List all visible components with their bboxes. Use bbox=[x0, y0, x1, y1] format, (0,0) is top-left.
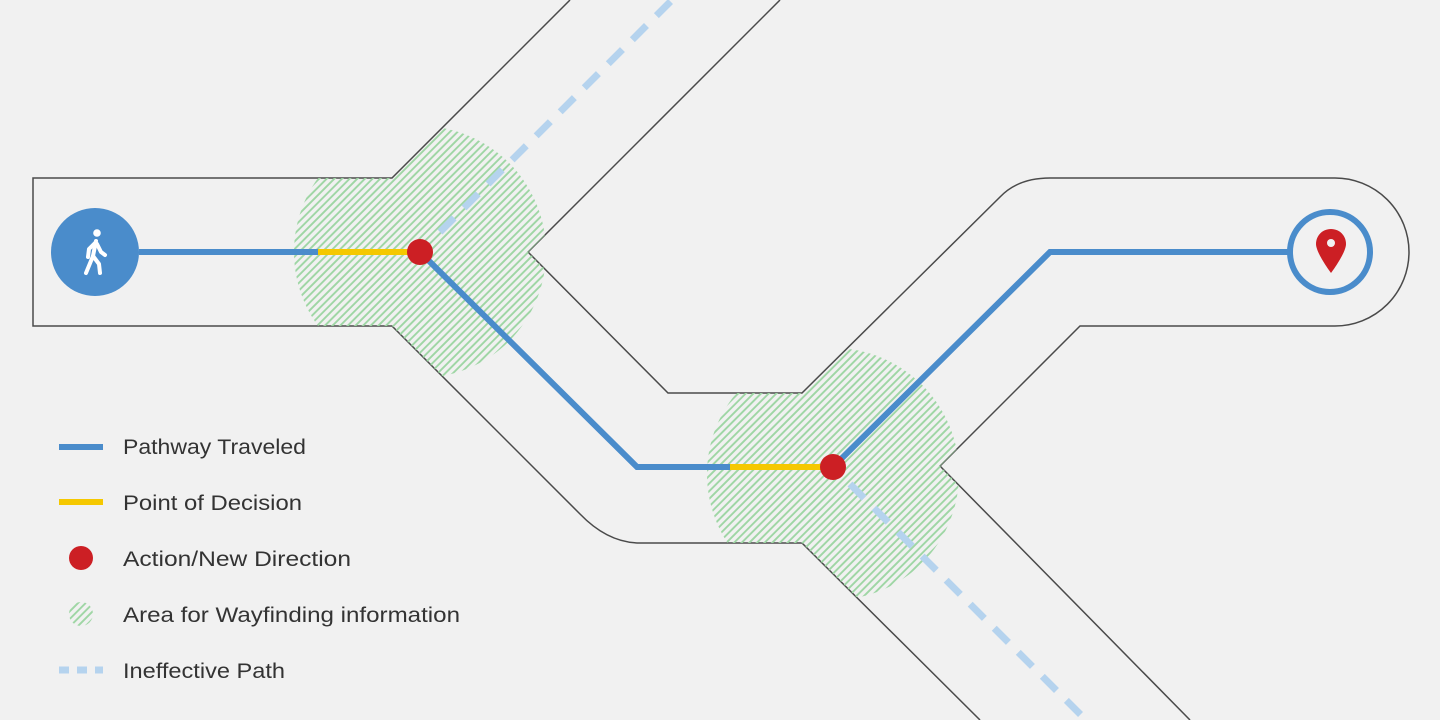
legend: ineffective path: Ineffective Path bbox=[123, 660, 285, 683]
points of decision bbox=[318, 252, 823, 467]
legend: action bbox=[69, 546, 351, 571]
action dots bbox=[407, 239, 846, 480]
legend: point of decision: Point of Decision bbox=[123, 492, 302, 515]
legend: wayfinding area: Area for Wayfinding information bbox=[123, 604, 460, 627]
legend: action: Action/New Direction bbox=[123, 548, 351, 571]
ineffective path dashes bbox=[440, 0, 1090, 720]
icon: walker start bbox=[51, 208, 139, 296]
legend bbox=[59, 436, 460, 683]
icon: destination pin bbox=[1290, 212, 1370, 292]
wayfinding area 2 bbox=[707, 348, 959, 600]
legend: wayfinding area bbox=[69, 602, 460, 627]
pathway traveled bbox=[139, 252, 1290, 467]
wayfinding areas bbox=[294, 126, 959, 600]
wayfinding area 1 bbox=[294, 126, 546, 378]
legend: pathway traveled: Pathway Traveled bbox=[123, 436, 306, 459]
